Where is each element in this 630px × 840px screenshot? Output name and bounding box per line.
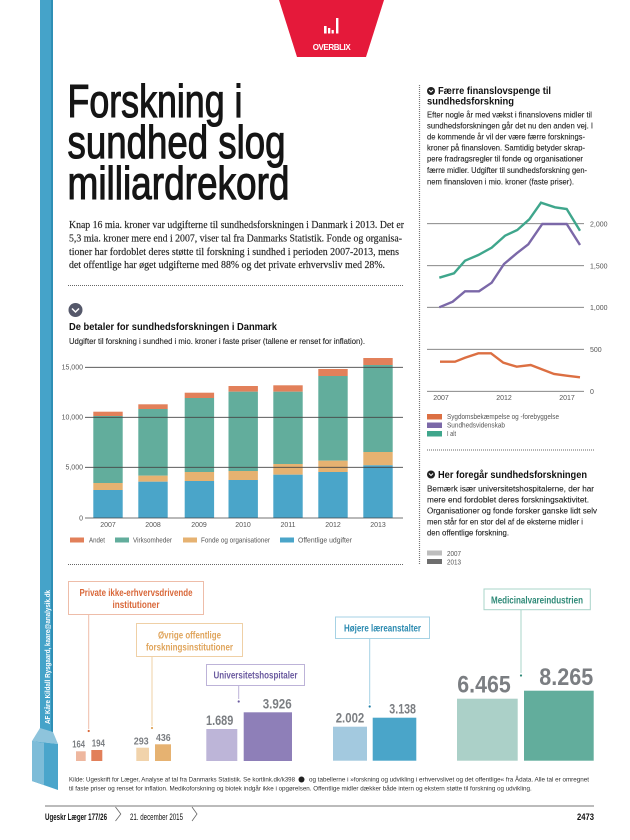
group: øvrige offentlige: forskningsinstitutioner [146, 642, 233, 654]
group: universitetshospitaler: 3.926 [263, 695, 292, 711]
group: private institutioner: institutioner [112, 599, 160, 611]
bar chart legend: Offentlige udgifter [298, 538, 353, 544]
group: medicinalvareindustrien: Medicinalvareindustrien [491, 595, 583, 606]
panel: finanslov text: de kommende år vil der være færre forsknings- [427, 132, 585, 142]
line chart: 500 [590, 347, 602, 354]
group: øvrige offentlige: Øvrige offentlige [158, 630, 221, 642]
footer: 2473 [577, 812, 594, 822]
group: private institutioner [68, 582, 204, 761]
group: højere læreanstalter: 3.138 [389, 702, 416, 717]
bar 2007 [93, 412, 123, 518]
bar chart legend: Fonde og organisationer [201, 538, 271, 544]
panel: her foregår text: Organisationer og fonde forsker ganske lidt selv [427, 506, 597, 515]
group: universitetshospitaler [206, 664, 304, 761]
year legend: 2013 [447, 560, 461, 566]
icon: chevron circle [68, 303, 82, 317]
year legend [427, 550, 461, 566]
panel: finanslov text: kroner på finansloven. Samtidig betyder skrap- [427, 144, 585, 152]
intro text [69, 220, 404, 271]
year legend: 2007 [447, 551, 461, 558]
line chart: 1,000 [590, 305, 608, 312]
panel: her foregår text: Her foregår sundhedsforskningen [438, 469, 587, 481]
stacked bar chart: 2013 [370, 522, 386, 529]
heading: bar chart: Udgifter til forskning i sundhed i mio. kroner i faste priser (tallene er renset for inflation). [69, 337, 365, 346]
line chart legend: I alt [447, 431, 456, 438]
section tab: overblik: OVERBLIX [313, 43, 351, 52]
bar 2009 [185, 393, 214, 518]
group: medicinalvareindustrien: 6.465 [457, 672, 511, 699]
heading: bar chart [69, 322, 365, 346]
group: private institutioner: 194 [92, 739, 105, 750]
stacked bar chart: 2009 [191, 522, 207, 529]
group: medicinalvareindustrien: 8.265 [539, 664, 593, 691]
stacked bar chart: 2012 [325, 522, 341, 529]
line chart: 2017 [559, 395, 575, 402]
line chart legend [427, 414, 559, 438]
panel: her foregår text: men står for en stor del af de eksterne midler i [427, 518, 583, 527]
intro text: tioner har fordoblet deres støtte til forskning i sundhed i perioden 2007-2013, mens [69, 247, 399, 258]
line: i alt [439, 203, 580, 278]
panel: her foregår text [427, 469, 597, 538]
group: private institutioner: Private ikke-erhvervsdrivende [80, 587, 193, 599]
footer: 21. december 2015 [130, 812, 183, 822]
panel: finanslov text [427, 86, 593, 186]
group: private institutioner: 164 [72, 739, 85, 750]
panel: finanslov text: sundhedsforskning [427, 96, 514, 108]
group: øvrige offentlige: 293 [134, 736, 149, 747]
panel: her foregår text: den offentlige forskning. [427, 529, 509, 538]
stacked bar chart: 10,000 [62, 414, 83, 422]
stacked bar chart: 15,000 [62, 364, 83, 372]
line chart: 2007 [433, 395, 449, 402]
panel: finanslov text: pere fradragsregler til fonde og organisationer [427, 155, 583, 164]
group: højere læreanstalter: Højere læreanstalter [344, 624, 421, 635]
stacked bar chart: 2011 [280, 522, 296, 529]
bar chart legend: Andet [89, 538, 105, 544]
line chart legend: Sygdomsbekæmpelse og -forebyggelse [447, 414, 559, 421]
line chart: 1,500 [590, 264, 608, 270]
footer [45, 806, 594, 822]
title [68, 75, 290, 209]
line chart [427, 203, 608, 402]
group: øvrige offentlige [134, 624, 242, 761]
line chart: 0 [590, 389, 594, 396]
line: sygdomsbekæmpelse [440, 353, 580, 377]
line chart legend: Sundhedsvidenskab [447, 422, 505, 430]
title: sundhed slog [68, 116, 286, 168]
section tab: overblik [279, 0, 384, 57]
intro text: Knap 16 mia. kroner var udgifterne til sundhedsforskningen i Danmark i 2013. Det er [69, 220, 404, 231]
bar chart legend [70, 538, 353, 544]
source note: Kilde: Ugeskrift for Læger, Analyse af tal fra Danmarks Statistik. Se kortlink.dk/k398 [69, 777, 295, 784]
panel: finanslov text: nem finansloven i mio. kroner (faste priser). [427, 177, 574, 186]
group: højere læreanstalter [333, 617, 430, 761]
footer: Ugeskr Læger 177/26 [45, 812, 107, 822]
bar 2011 [273, 385, 303, 518]
panel: finanslov text: Efter nogle år med vækst i finanslovens midler til [427, 110, 592, 120]
stacked bar chart: 2010 [235, 522, 251, 529]
title: milliardrekord [68, 157, 290, 209]
stacked bar chart: 2007 [100, 522, 116, 529]
bar 2010 [228, 386, 258, 518]
bar chart legend: Virksomheder [133, 538, 173, 544]
source note: og tabellerne i »forskning og udvikling i erhvervslivet og det offentlige« fra Ådata. Alle tal er omregnet [309, 775, 589, 784]
stacked bar chart [62, 358, 403, 529]
panel: her foregår text: Bemærk især universitetshospitalerne, der har [427, 484, 594, 493]
group: universitetshospitaler: 1.689 [206, 712, 233, 728]
intro text: 5,3 mia. kroner mere end i 2007, viser tal fra Danmarks Statistik. Fonde og organisa- [69, 234, 402, 244]
panel: finanslov text: sundhedsforskningen går det nu den anden vej. I [427, 122, 593, 130]
bar 2012 [318, 369, 348, 518]
bar 2008 [138, 404, 168, 518]
group: højere læreanstalter: 2.002 [336, 711, 364, 726]
line chart: 2,000 [590, 222, 608, 228]
group: universitetshospitaler: Universitetshospitaler [214, 670, 298, 682]
line: sundhedsvidenskab [439, 224, 580, 307]
byline ribbon: AF Kåre Kildall Rysgaard, kaare@analysik.dk [43, 589, 52, 724]
stacked bar chart: 2008 [145, 522, 161, 529]
group: øvrige offentlige: 436 [156, 733, 171, 744]
heading: bar chart: De betaler for sundhedsforskningen i Danmark [69, 322, 277, 333]
group: medicinalvareindustrien [457, 589, 594, 761]
intro text: det offentlige har øget udgifterne med 88% og det private erhvervsliv med 28%. [69, 260, 385, 271]
panel: finanslov text: færre midler. Udgifter til sundhedsforskning gen- [427, 166, 587, 175]
byline ribbon [32, 0, 58, 790]
line chart: 2012 [496, 395, 512, 402]
panel: her foregår text: mere end fordoblet deres forskningsaktivitet. [427, 495, 589, 504]
source note: til faste priser og renset for inflation. Medikoforskning og biotek indgår ikke i opgørelsen. Offentlige midler dækker både intern og ekstern støtte til forskning og udvikling. [69, 785, 532, 793]
stacked bar chart: 5,000 [65, 464, 83, 472]
title: Forskning i [68, 75, 242, 127]
bar 2013 [363, 358, 393, 518]
stacked bar chart: 0 [79, 516, 83, 522]
source note [69, 775, 589, 793]
panel: finanslov text: Færre finanslovspenge til [438, 86, 551, 97]
